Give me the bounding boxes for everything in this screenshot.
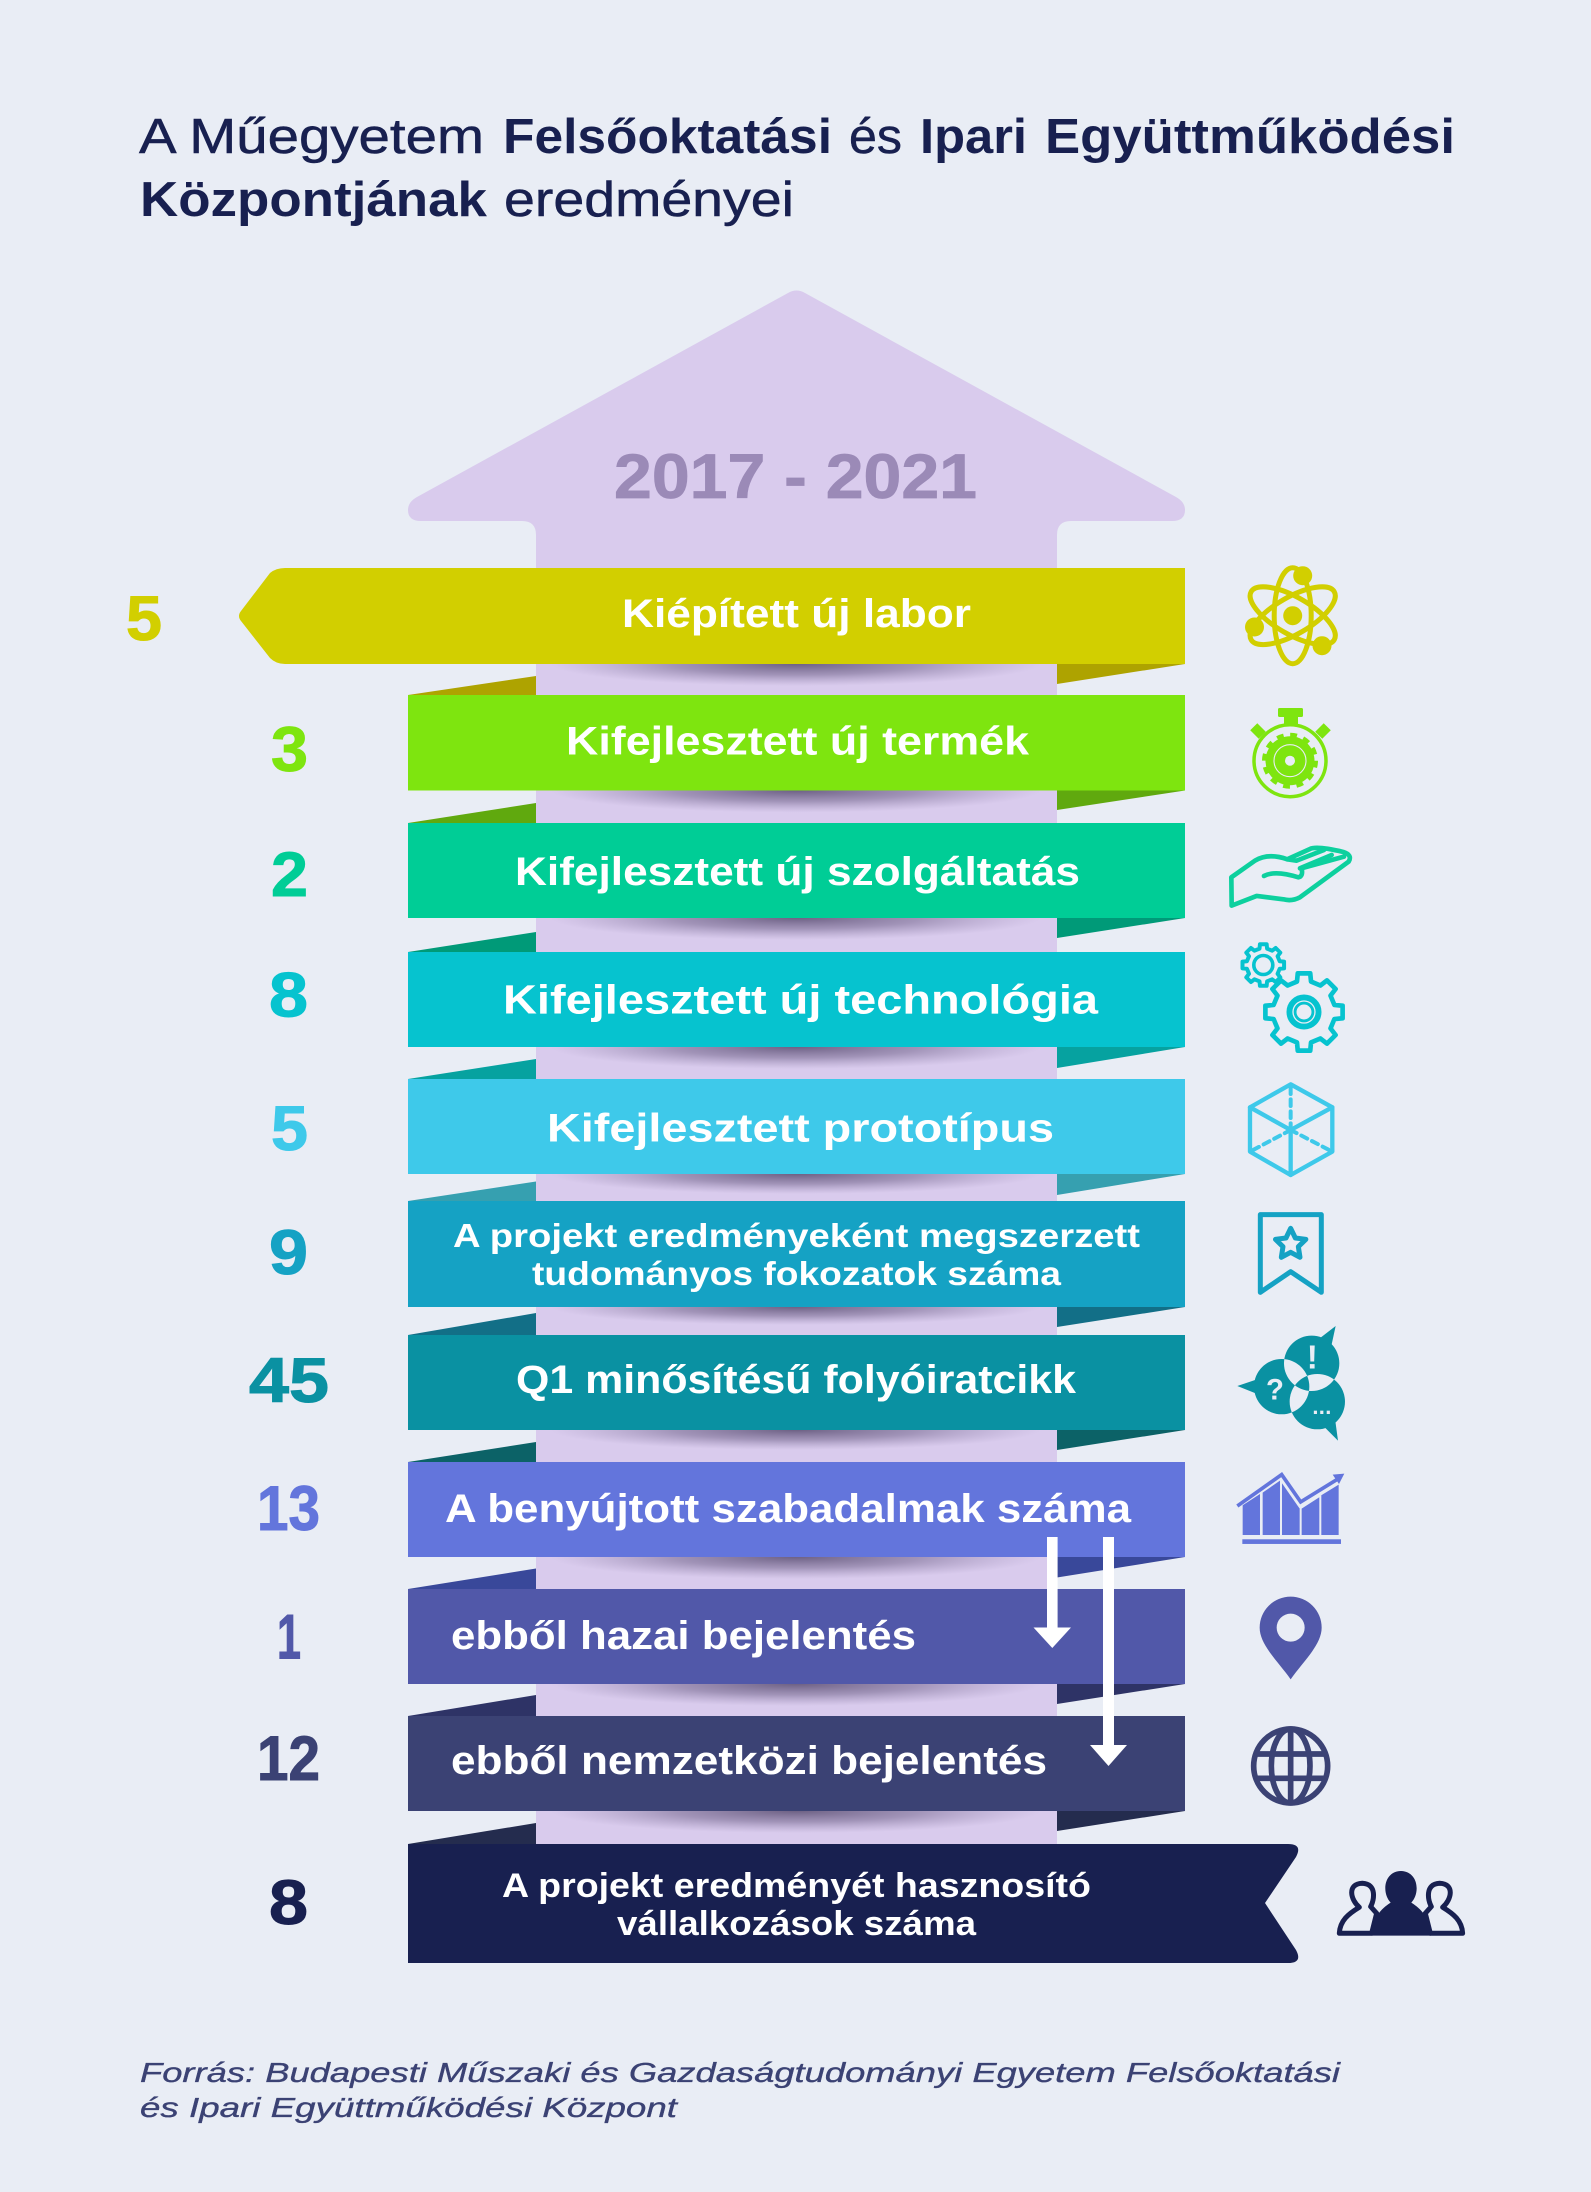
ribbon (408, 1201, 1185, 1307)
ribbon label: Kifejlesztett új termék (566, 720, 1030, 764)
source note: és Ipari Együttműködési Központ (140, 2092, 679, 2123)
ribbon label: Q1 minősítésű folyóiratcikk (516, 1358, 1077, 1402)
ribbon label: tudományos fokozatok száma (532, 1255, 1062, 1292)
ribbon label: vállalkozások száma (617, 1905, 977, 1943)
ribbon (239, 568, 1185, 664)
title: Központjának (140, 173, 488, 227)
number: 12 (257, 1724, 320, 1794)
title: Ipari (920, 110, 1027, 164)
row: A benyújtott szabadalmak száma (257, 1462, 1344, 1589)
title: Felsőoktatási (503, 110, 832, 164)
number: 5 (271, 1094, 308, 1164)
number: 3 (271, 715, 308, 785)
ribbon (408, 1335, 1185, 1430)
row: Q1 minősítésű folyóiratcikk (249, 1326, 1345, 1462)
icon: open hand (1231, 848, 1350, 906)
title: Együttműködési (1045, 110, 1455, 164)
arrow: patents to domestic filings (1034, 1537, 1071, 1648)
ribbon label: Kifejlesztett új technológia (503, 976, 1099, 1022)
ribbon label: A projekt eredményeként megszerzett (453, 1217, 1140, 1254)
icon: speech bubbles (1237, 1326, 1345, 1441)
ribbon label: Kifejlesztett új szolgáltatás (515, 850, 1080, 894)
row: Kifejlesztett új technológia (269, 944, 1343, 1079)
row: Kifejlesztett új termék (271, 695, 1331, 823)
source note (140, 2057, 1341, 2123)
number: 8 (269, 1868, 308, 1938)
icon: globe (1254, 1729, 1328, 1803)
icon: bookmark star (1260, 1215, 1321, 1292)
ribbon (408, 1589, 1185, 1684)
period label: 2017 - 2021 (614, 442, 977, 512)
ribbon (408, 1079, 1185, 1174)
icon: speech bubbles: ! (1307, 1339, 1318, 1376)
ribbon label: ebből nemzetközi bejelentés (451, 1739, 1047, 1783)
number: 1 (277, 1602, 301, 1672)
row: Kifejlesztett új szolgáltatás (271, 823, 1350, 952)
icon: cube (1250, 1084, 1332, 1175)
ribbon label (453, 1217, 1140, 1292)
title: A Műegyetem (139, 110, 484, 164)
ribbon label: A benyújtott szabadalmak száma (445, 1487, 1132, 1531)
number: 9 (269, 1218, 308, 1288)
number: 5 (126, 584, 162, 654)
row: tudományos fokozatok (269, 1201, 1321, 1335)
icon: chart with rising arrow (1237, 1474, 1344, 1544)
icon: speech bubbles: ? (1266, 1373, 1284, 1406)
ribbon label (502, 1867, 1091, 1943)
ribbon (408, 1462, 1185, 1557)
number: 2 (271, 840, 308, 910)
ribbon (408, 695, 1185, 790)
ribbon (408, 1716, 1185, 1811)
ribbon label: ebből hazai bejelentés (451, 1614, 916, 1658)
row: A projekt eredményét hasznosító vállalkozások száma (269, 1844, 1463, 1963)
row: Kifejlesztett prototípus (271, 1079, 1332, 1201)
title: és (849, 110, 902, 164)
row: Kiépített új labor (126, 566, 1344, 695)
icon: stopwatch gear (1250, 708, 1331, 797)
ribbon label: Kifejlesztett prototípus (547, 1106, 1054, 1150)
number: 13 (257, 1474, 320, 1544)
icon: speech bubbles: ... (1312, 1394, 1332, 1419)
ribbon (408, 823, 1185, 918)
icon: atom (1242, 566, 1344, 664)
row: ebből nemzetközi bejelentés (257, 1716, 1328, 1844)
ribbon (408, 1844, 1298, 1963)
icon: gears (1243, 944, 1343, 1051)
number: 8 (269, 960, 308, 1030)
ribbon label: A projekt eredményét hasznosító (502, 1867, 1091, 1905)
title: eredményei (504, 173, 794, 227)
title (139, 110, 1455, 227)
ribbon label: Kiépített új labor (622, 592, 971, 636)
source note: Forrás: Budapesti Műszaki és Gazdaságtudományi Egyetem Felsőoktatási (140, 2057, 1341, 2088)
number: 45 (249, 1346, 329, 1416)
arrow: patents to international filings (1090, 1537, 1127, 1766)
icon: people (1339, 1871, 1463, 1936)
icon: map pin (1260, 1597, 1322, 1679)
ribbon (408, 952, 1185, 1047)
row: ebből hazai bejelentés (277, 1589, 1322, 1716)
